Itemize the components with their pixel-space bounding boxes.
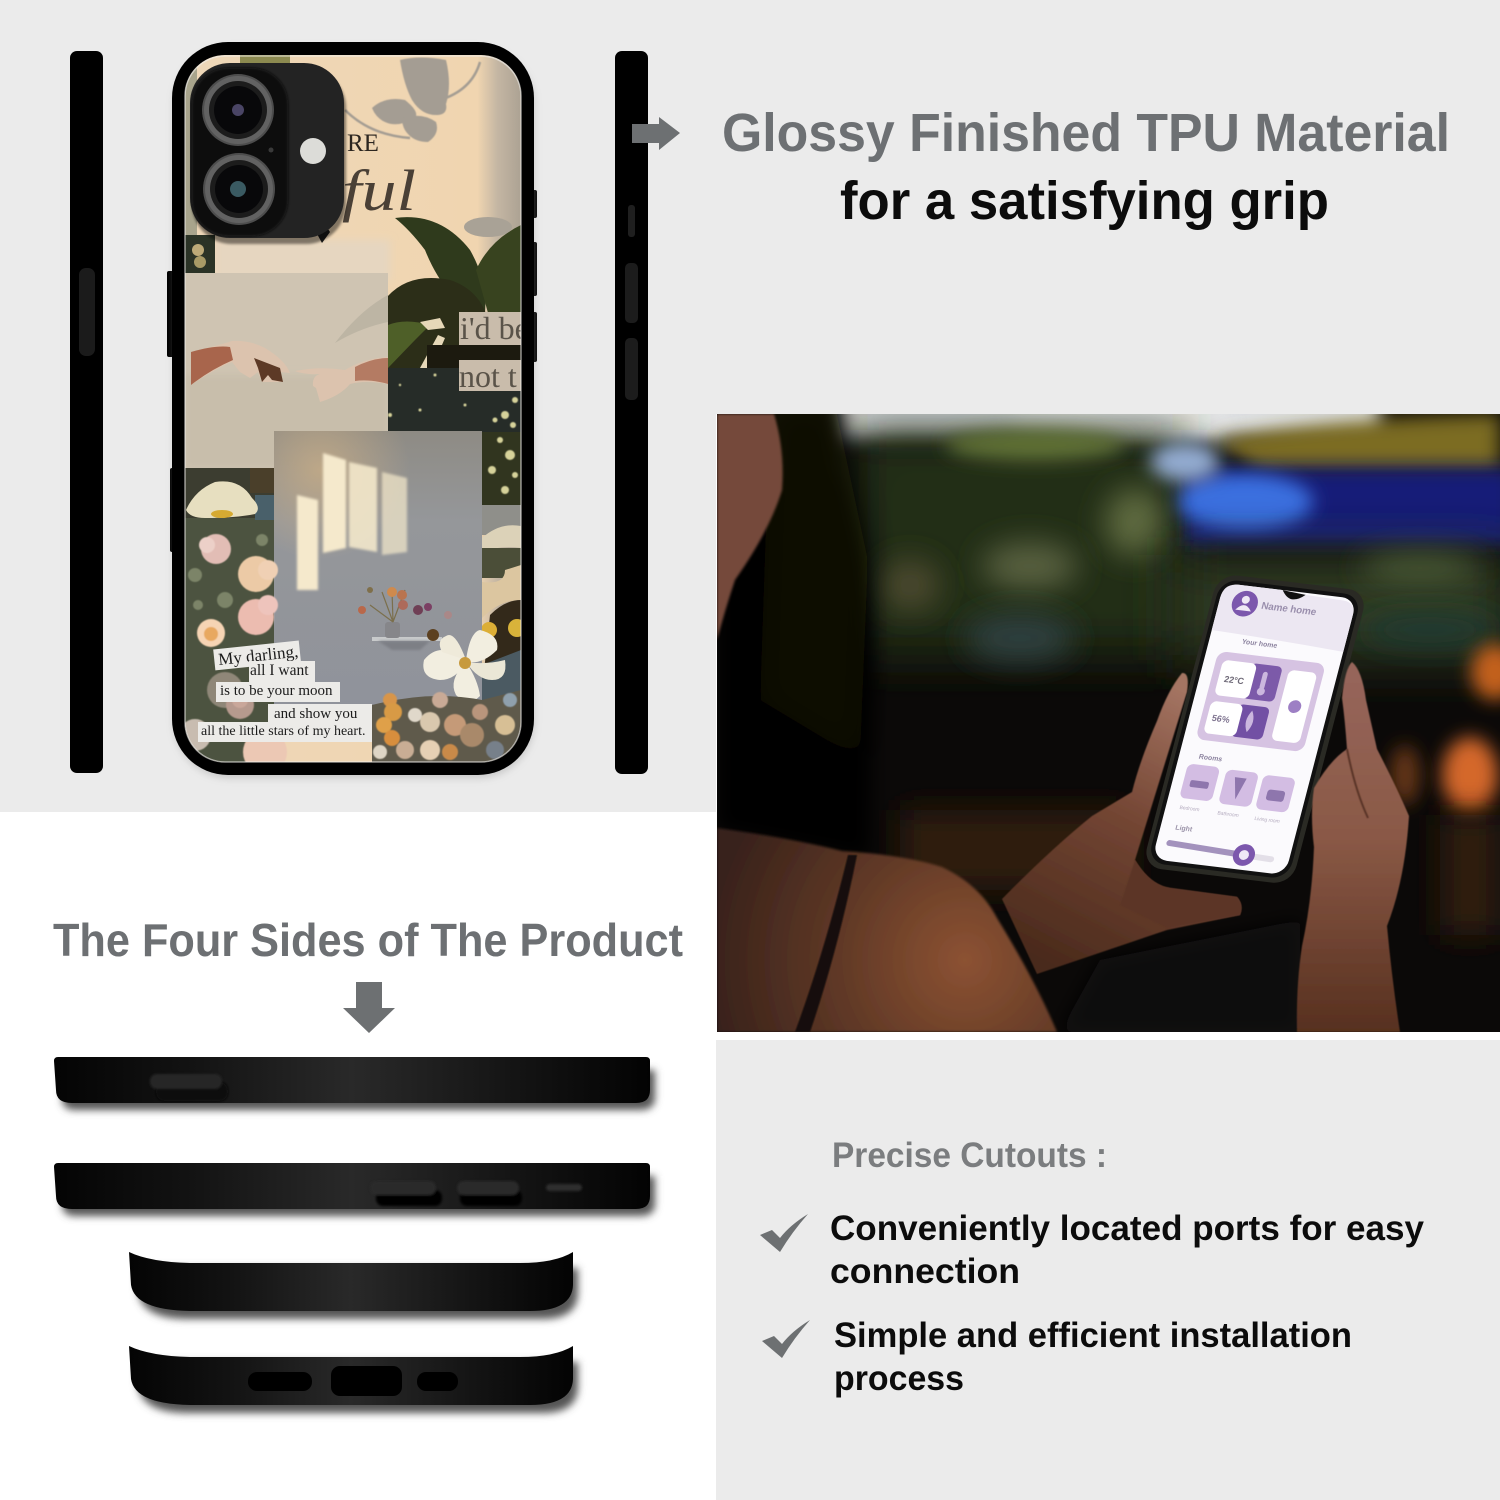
climate panel: 22°C: [1223, 674, 1246, 686]
dress strap: [795, 855, 857, 1032]
arrow pointing down: [343, 982, 395, 1033]
camera island: [190, 63, 346, 244]
heading: precise cutouts: Precise Cutouts :: [832, 1136, 1107, 1175]
left side view of case: [70, 51, 103, 773]
case edge strip 4: [129, 1346, 578, 1413]
collage artwork: [179, 55, 529, 774]
photo: woman holding phone: [717, 395, 1500, 1032]
bottom flower bed: [372, 690, 521, 765]
poem scraps: [198, 641, 372, 742]
room tiles: [1179, 763, 1297, 813]
case side buttons: [167, 190, 537, 552]
heading: glossy finished: Glossy Finished TPU Material: [722, 103, 1450, 163]
cursive wall text: [316, 130, 416, 243]
room labels: Bathroom: [1217, 811, 1239, 819]
light slider: [1166, 840, 1274, 866]
bare shoulder: [717, 828, 1057, 1032]
camera flash: [300, 138, 326, 164]
left floral panel: [179, 468, 287, 774]
right hand of creation: [295, 357, 388, 402]
bullet 1 text: Conveniently located ports for easy: [830, 1209, 1425, 1248]
background: bottom-right grey panel: [716, 1040, 1500, 1500]
poem scraps: is to be your moon: [220, 683, 333, 699]
bullet 2 text: process: [834, 1359, 964, 1398]
blurred background bokeh: [840, 395, 1500, 1032]
your home label: Your home: [1241, 639, 1278, 650]
case black frame: [172, 42, 534, 775]
beige panel with reaching hands: [185, 273, 388, 468]
text scraps: i'd be / not t: not t: [459, 358, 517, 394]
cursive wall text: ful: [342, 158, 416, 223]
check mark 2: [762, 1320, 810, 1358]
glossy inner rim: [185, 56, 521, 762]
climate panel: 56%: [1211, 713, 1231, 725]
room labels: Living room: [1254, 816, 1280, 825]
text scraps: i'd be / not t: i'd be: [460, 310, 529, 346]
climate panel: [1195, 651, 1326, 752]
poem scraps: all the little stars of my heart.: [201, 724, 365, 739]
poem scraps: and show you: [274, 706, 358, 722]
dark foliage panel: [388, 368, 526, 720]
bullet 2 text: Simple and efficient installation: [834, 1316, 1352, 1355]
left hand: [1002, 673, 1241, 974]
background: top-right grey panel: [716, 0, 1500, 414]
subheading: satisfying grip: for a satisfying grip: [840, 171, 1329, 231]
heading: four sides: The Four Sides of The Product: [53, 914, 683, 966]
rooms label: Rooms: [1198, 754, 1223, 763]
face and hair: [717, 405, 872, 860]
thumb over phone edge: [1127, 860, 1242, 922]
right hand gripping phone: [1297, 662, 1409, 1032]
white flower: [423, 630, 505, 702]
case edge strip 2: [54, 1163, 655, 1216]
white divider below photo: [716, 1032, 1500, 1040]
left hand of creation: [191, 341, 290, 385]
case edge strip 1: [54, 1057, 655, 1110]
arrow pointing right: [632, 117, 680, 150]
text scraps: i'd be / not t: [459, 312, 521, 391]
room labels: Bedroom: [1179, 805, 1200, 813]
avatar: [1232, 590, 1258, 616]
phone case back with collage: [167, 42, 537, 778]
upper lens: [202, 74, 274, 146]
poem scraps: all I want: [250, 662, 309, 679]
room labels: [1180, 806, 1280, 823]
light label: Light: [1174, 825, 1194, 834]
phone screen: [1152, 583, 1357, 875]
bullet 2 text: [834, 1316, 1352, 1398]
check mark 1: [760, 1214, 808, 1252]
right side view of case: [615, 51, 648, 774]
shelf with vases: [358, 587, 452, 650]
app title: Name home: [1260, 601, 1318, 618]
background: top-left grey panel: [0, 0, 716, 812]
dark flower column: [185, 235, 215, 277]
lower lens: [203, 153, 275, 225]
tropical plant leaves: [388, 217, 521, 369]
cursive wall text: RE: [347, 130, 379, 157]
bullet 1 text: connection: [830, 1252, 1020, 1291]
grey room panel with window light: [274, 431, 482, 731]
smartphone in hand: [1142, 573, 1368, 885]
case edge strip 3: [129, 1252, 578, 1319]
poem scraps: My darling,: [217, 642, 299, 669]
bullet 1 text: [830, 1209, 1425, 1291]
leaf shadows: [345, 58, 480, 142]
